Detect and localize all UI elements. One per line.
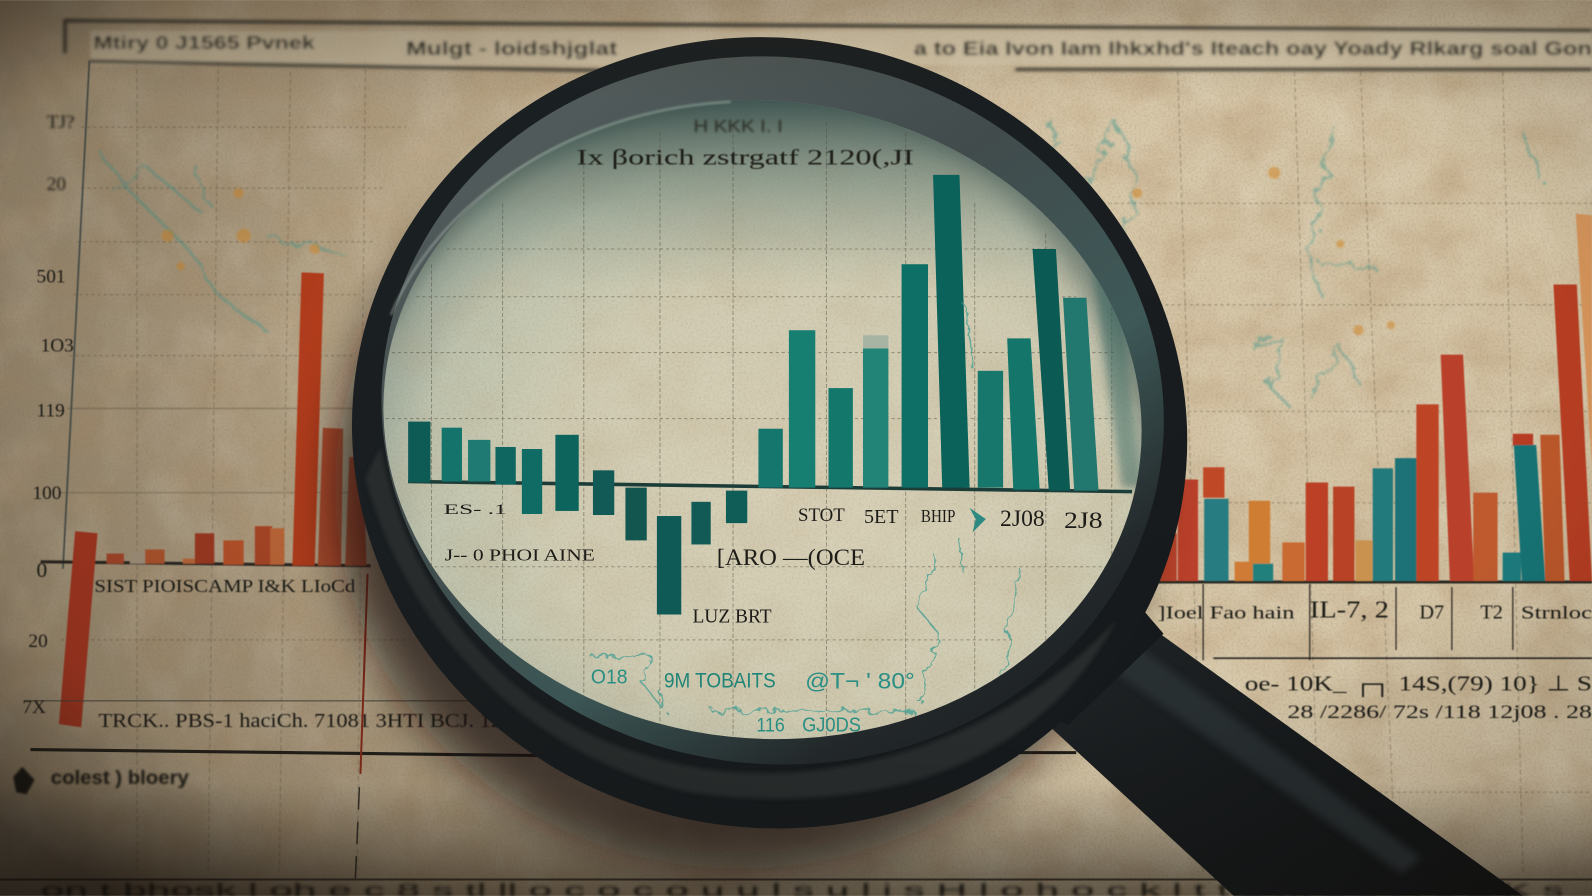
y axis and labels: 20 (47, 174, 66, 195)
lens teal annotations (589, 305, 1020, 736)
handle highlight (1099, 638, 1421, 873)
y axis and labels: 0 (37, 558, 47, 582)
header title right: a to Eia Ivon Iam Ihkxhd's Iteach oay Yoady Rlkarg soal Gon (914, 39, 1592, 60)
left bar chart (41, 272, 371, 727)
lens title: Ix βorich zstrgatf 2120(,JI (577, 145, 914, 170)
lens data labels: LUZ BRT (692, 606, 772, 628)
lens data labels: J-- 0 PHOI AINE (445, 546, 595, 565)
lens data labels: BHIP (921, 506, 955, 526)
left chart second label row: TRCK.. PBS-1 haciCh. 71081 3HTI BCJ. 1Z (98, 710, 505, 732)
y axis and labels: 100 (32, 483, 61, 504)
y axis and labels: 1O3 (41, 336, 74, 357)
lens top reflection (396, 100, 1142, 478)
left chart axis labels: SIST PIOISCAMP I&K LIoCd (94, 576, 355, 596)
header title centre: Mulgt - loidshjglat (406, 39, 618, 60)
lens teal annotations: 116 (756, 715, 785, 736)
right bar chart (1152, 213, 1592, 582)
faint map lines and ink specks (96, 122, 1543, 406)
inner sleeve (335, 6, 1210, 815)
left rules and red divider (0, 574, 1592, 880)
handle body (1042, 622, 1523, 896)
right chart labels: oe- 10K_ ┌┐ 14S,(79) 10} ⊥ S (1245, 672, 1592, 698)
header title left: Mtiry 0 J1565 Pvnek (93, 32, 316, 53)
lens data labels: 2J08 (1000, 506, 1045, 532)
lens data labels: ES- .1 (444, 501, 507, 518)
glass content (383, 100, 1142, 740)
right chart labels: T2 (1480, 602, 1503, 624)
lens data labels: 2J8 (1064, 508, 1103, 534)
lens data labels (444, 501, 1103, 628)
right chart labels (1157, 584, 1592, 723)
legend icon (13, 767, 35, 794)
lens title: H KKK I. I (693, 116, 783, 136)
lens teal arrow (970, 508, 986, 532)
lens teal annotations: 9M TOBAITS (664, 669, 776, 693)
y axis and labels: 501 (37, 267, 65, 288)
legend label: colest ) bloery (51, 768, 189, 789)
lens teal bars (408, 175, 1142, 615)
lens title (577, 116, 914, 170)
lens data labels: 5ET (864, 506, 899, 528)
glass edge highlight (391, 102, 731, 315)
magnifying glass (352, 37, 1188, 828)
header band (65, 21, 1592, 71)
lens teal annotations: O18 (591, 667, 627, 689)
right chart labels: D7 (1419, 602, 1444, 624)
lens data labels: [ARO —(OCE (717, 545, 865, 571)
lens baseline (408, 482, 1132, 492)
y axis and labels (22, 61, 89, 718)
lens teal annotations: GJ0DS (802, 714, 861, 736)
handle (1041, 605, 1523, 896)
handle collar (1041, 605, 1164, 725)
lens data labels: STOT (798, 505, 845, 526)
lens grid (386, 122, 1137, 741)
lower rim shading (366, 447, 1117, 799)
y axis and labels: 20 (28, 631, 48, 652)
outer rim (289, 0, 1250, 894)
y axis and labels: 7X (22, 697, 46, 718)
right chart labels: IL-7, 2 (1310, 597, 1389, 624)
right chart labels: 28 /2286/ 72s /118 12j08 . 28 (1287, 702, 1592, 723)
right chart labels: ]Ioel Fao hain (1157, 603, 1295, 623)
lens teal annotations: @T¬ ' 80° (805, 669, 915, 694)
y axis and labels: TJ? (47, 112, 75, 133)
right chart labels: Strnloc (1521, 603, 1592, 623)
y axis and labels: 119 (37, 401, 65, 422)
